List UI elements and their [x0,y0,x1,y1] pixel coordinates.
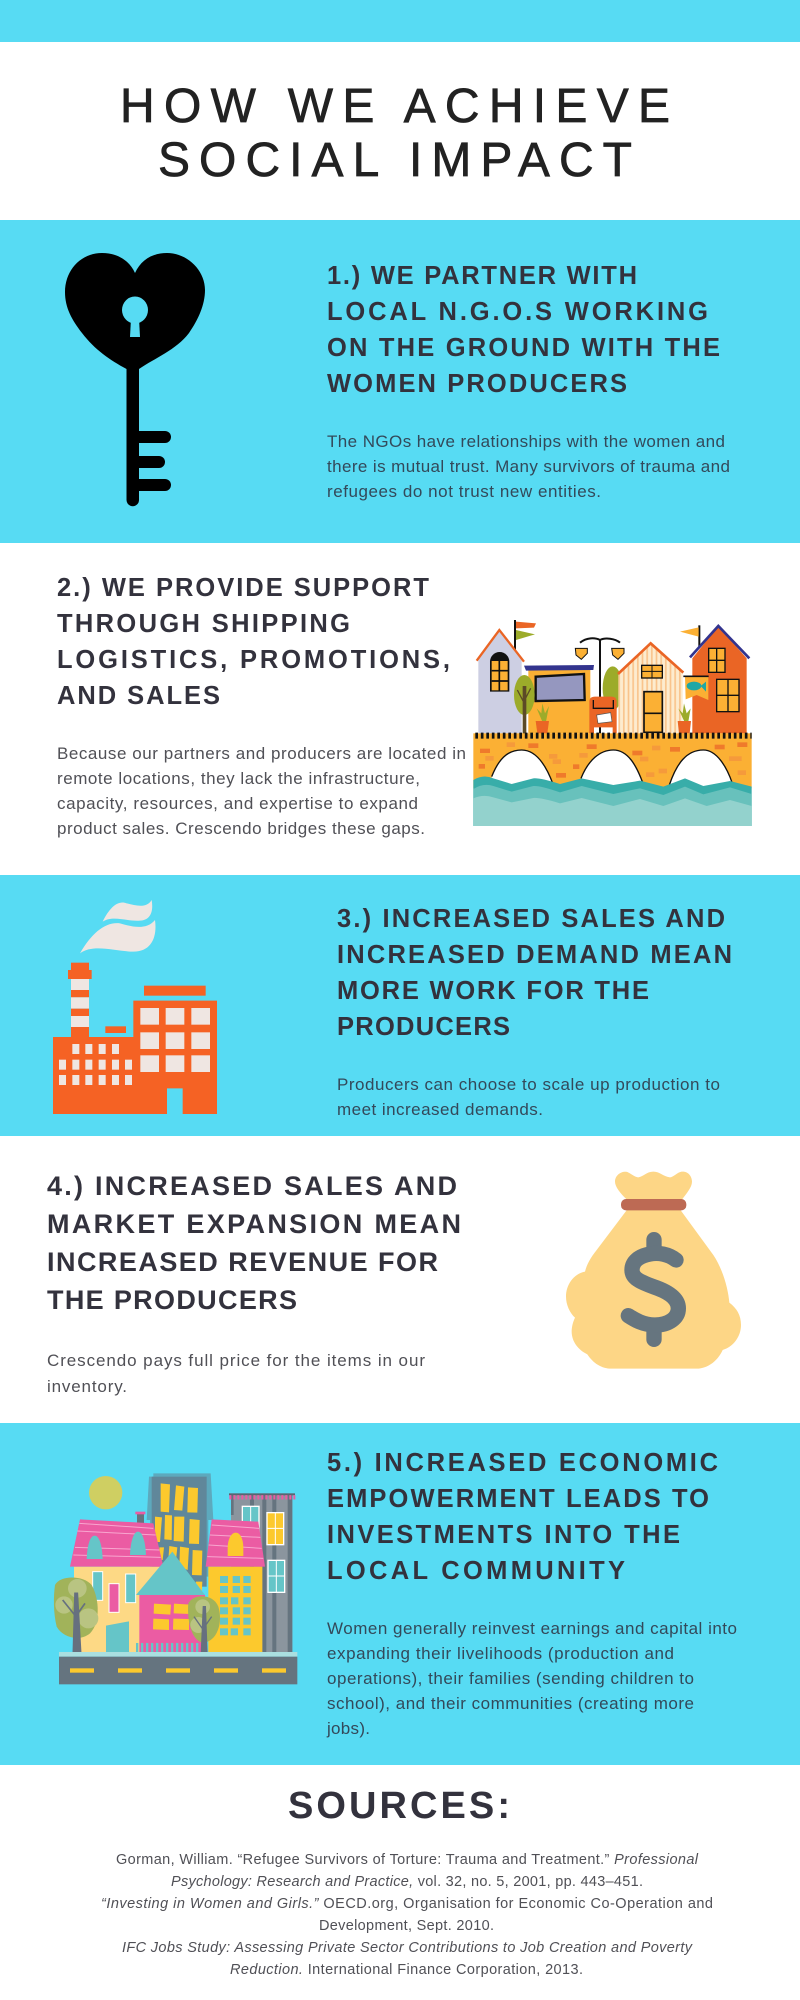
text: step 4 body: inventory. [47,1377,127,1396]
road [59,1652,297,1684]
house: lavender with flags [477,620,536,733]
heading: step 3: MORE WORK FOR THE [337,977,649,1005]
title: SOCIAL IMPACT [158,134,632,187]
text: source citations: Reduction. International Finance Corporation, 2013. [230,1962,583,1978]
text: source citations: Gorman, William. “Refugee Survivors of Torture: Trauma and Treatment.” Professional [116,1852,699,1868]
heading: step 3: INCREASED DEMAND MEAN [337,941,732,969]
heading: step 1: ON THE GROUND WITH THE [327,334,720,362]
heading: step 3: 3.) INCREASED SALES AND [337,905,725,933]
panel: step 3 increased demand [0,875,800,1136]
striped house [618,643,691,733]
text: step 4 body: Crescendo pays full price for the items in our [47,1351,425,1370]
shop with blue window [514,665,594,733]
left house with pink roof [70,1512,163,1653]
heading: step 2: LOGISTICS, PROMOTIONS, [57,646,450,674]
heading: step 2 [57,574,450,710]
text: step 2 body: product sales. Crescendo bridges these gaps. [57,819,425,838]
heading: step 4: 4.) INCREASED SALES AND [47,1171,457,1201]
illustration: houses on a bridge [473,620,752,826]
sun [89,1476,122,1509]
heading: step 1: 1.) WE PARTNER WITH [327,262,637,290]
panel: step 1 partner with NGOs [0,220,800,543]
text: step 2 body [57,744,466,838]
title [120,80,670,187]
heading: step 1 [327,262,720,398]
heading: step 2: THROUGH SHIPPING [57,610,350,638]
chimney [68,963,92,1037]
heading: step 5: 5.) INCREASED ECONOMIC [327,1449,718,1477]
trees [54,1577,220,1653]
heading: step 4 [47,1171,461,1315]
icon: money bag [566,1172,741,1369]
icon: factory [53,900,217,1114]
heading: step 3: PRODUCERS [337,1013,510,1041]
text: source citations [101,1852,713,1978]
text: source citations: Development, Sept. 2010. [319,1918,494,1934]
street lamp, tree and mailbox [575,638,624,733]
heading: step 4: INCREASED REVENUE FOR [47,1247,438,1277]
text: step 1 body [327,432,730,501]
text: step 1 body: refugees do not trust new entities. [327,482,601,501]
heading: step 1: LOCAL N.G.O.S WORKING [327,298,708,326]
panel: step 5 community investment [0,1423,800,1765]
text: step 5 body: school), and their communities (creating more [327,1694,694,1713]
panel: step 2 shipping, promotions and sales [57,574,752,838]
text: source citations: Psychology: Research and Practice, vol. 32, no. 5, 2001, pp. 443–451. [171,1874,643,1890]
text: step 2 body: capacity, resources, and expertise to expand [57,794,418,813]
heading: step 2: AND SALES [57,682,220,710]
heading: step 4: MARKET EXPANSION MEAN [47,1209,461,1239]
panel: step 4 increased revenue [47,1171,741,1396]
text: source citations: “Investing in Women and Girls.” OECD.org, Organisation for Economic Co-Operation and [101,1896,713,1912]
grey tower [229,1493,295,1653]
heading: step 5: INVESTMENTS INTO THE [327,1521,680,1549]
text: step 5 body: jobs). [326,1719,370,1738]
title: HOW WE ACHIEVE [120,80,670,133]
text: step 2 body: Because our partners and producers are located in [57,744,466,763]
text: source citations: IFC Jobs Study: Assessing Private Sector Contributions to Job Creation and Poverty [122,1940,693,1956]
text: step 5 body: Women generally reinvest earnings and capital into [327,1619,737,1638]
yellow building [206,1519,265,1653]
heading: step 5 [327,1449,718,1585]
text: step 5 body: expanding their livelihoods (production and [327,1644,674,1663]
text: step 3 body: meet increased demands. [337,1100,543,1119]
heading: step 5: LOCAL COMMUNITY [327,1557,625,1585]
icon: heart key [65,253,205,506]
smoke clouds [80,900,155,953]
text: step 3 body: Producers can choose to scale up production to [337,1075,720,1094]
text: step 5 body [326,1619,737,1738]
teal tower [147,1473,213,1593]
top colour band [0,0,800,42]
text: step 2 body: remote locations, they lack the infrastructure, [57,769,420,788]
text: step 4 body [47,1351,425,1396]
heading: step 2: 2.) WE PROVIDE SUPPORT [57,574,429,602]
pink house [136,1552,205,1653]
text: step 3 body [337,1075,720,1119]
stone bridge with arches [473,733,752,788]
heading: step 5: EMPOWERMENT LEADS TO [327,1485,709,1513]
illustration: colourful town [54,1473,297,1684]
text: step 5 body: operations), their families (sending children to [327,1669,694,1688]
heading: step 3 [337,905,732,1041]
factory building [53,986,217,1114]
heading: step 4: THE PRODUCERS [47,1285,297,1315]
text: step 1 body: The NGOs have relationships with the women and [327,432,725,451]
heading: sources: SOURCES: [288,1785,510,1827]
heading: step 1: WOMEN PRODUCERS [327,370,627,398]
water waves [473,777,752,826]
orange house with fish sign [680,625,749,733]
text: step 1 body: there is mutual trust. Many survivors of trauma and [327,457,730,476]
